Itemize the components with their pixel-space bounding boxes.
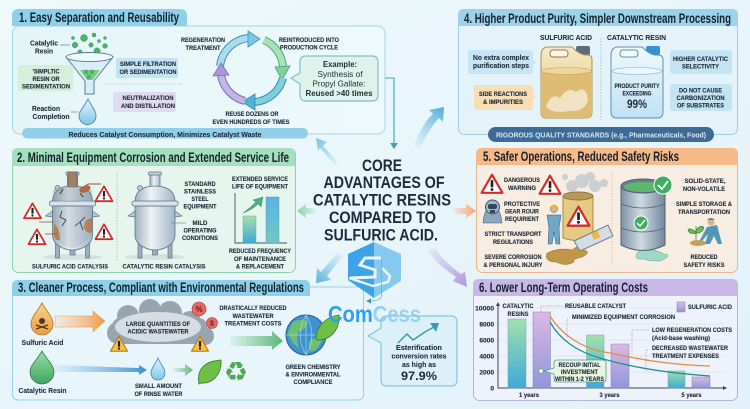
chart: service life: [229, 176, 291, 270]
arrow: to panel 3: [316, 252, 343, 283]
tag: no carbonization: CARBONIZATION: [676, 95, 725, 102]
tag: simple filtration: SIMPLE FILTRATION: [120, 61, 176, 68]
tag: no carbonization: OF SUBSTRATES: [677, 102, 725, 110]
icon: warning triangle: [95, 186, 113, 201]
quality pill: [488, 127, 714, 142]
label: protective gear: [504, 201, 541, 223]
title: CORE: [362, 157, 402, 175]
chart: operating costs: REUSABLE CATALYST: [565, 303, 626, 310]
icon: cost badge: $: [210, 320, 214, 328]
label: mild conditions: [171, 220, 219, 242]
icon: warning: [482, 175, 502, 193]
tag: neutralization: AND DISTILLATION: [121, 103, 175, 110]
tag: selectivity: SELECTIVITY: [682, 64, 720, 70]
label: catalytic resin: Catalytic: [30, 38, 58, 48]
arrow: rinse to leaf: [173, 364, 193, 376]
tag: resin or sedimentation: 'SIMPLTIC: [32, 68, 60, 76]
arrow: to panel 6: [428, 248, 467, 287]
heading 6: 6. Lower Long-Term Operating Costs: [479, 280, 648, 295]
heading 1: 1. Easy Separation and Reusability: [19, 10, 179, 25]
label: reuse: REUSE DOZENS OR: [226, 111, 279, 118]
label: solid state: SOLID-STATE,: [684, 178, 726, 185]
chart: service life: & REPLACEMENT: [236, 264, 284, 270]
label: reduced costs: TREATMENT COSTS: [224, 320, 282, 328]
callout: propyl gallate example: [291, 56, 378, 101]
label: reduced costs: [220, 305, 287, 328]
chart: operating costs: LOW REGENERATION COSTS: [652, 327, 733, 334]
label: severe corrosion: & PERSONAL INJURY: [484, 262, 543, 269]
icon: warning: [191, 336, 209, 351]
icon: leaf: [198, 360, 221, 384]
label: protective gear: GEAR ROUIR: [505, 208, 539, 216]
panel: 6 lower long-term costs: [473, 279, 738, 400]
icon: respirator suit: [483, 200, 502, 223]
panel: 3 cleaner process: [12, 280, 364, 400]
quality pill: RIGOROUS QUALITY STANDARDS (e.g., Pharmaceuticals, Food): [496, 130, 706, 140]
panel: 1 easy separation and reusability: [12, 9, 385, 139]
label: catalytic resin: [30, 38, 70, 56]
label: rate text: Esterification: [396, 343, 442, 352]
icon: corroded reactor: [39, 172, 102, 260]
heading 5: 5. Safer Operations, Reduced Safety Risks: [483, 149, 679, 164]
chart: operating costs: [475, 302, 733, 399]
title: SULFURIC ACID.: [324, 226, 438, 244]
chart: service life: EXTENDED SERVICE: [232, 176, 288, 183]
arrow: to panel 5: [453, 204, 476, 218]
label: green chemistry: COMPLIANCE: [294, 379, 333, 386]
watermark logo: [328, 242, 421, 327]
label: rate text: as high as: [402, 360, 436, 369]
chart: operating costs: 2000: [479, 370, 494, 376]
panel: 2 minimal equipment corrosion: [12, 148, 296, 272]
label: simple storage: SIMPLE STORAGE &: [676, 201, 732, 208]
tag: no extra purification: No extra complex: [473, 53, 530, 62]
label: rinse water: OF RINSE WATER: [134, 391, 183, 398]
connector arrow from example callout to centre: [378, 78, 398, 149]
label: sulfuric acid: Sulfuric Acid: [22, 338, 64, 347]
title: COMPARED TO: [329, 209, 436, 227]
chart: operating costs: 0: [490, 386, 494, 392]
label: simple storage: TRANSPORTATION: [678, 209, 730, 216]
label: rinse water: SMALL AMOUNT: [135, 383, 182, 390]
label: sulfuric acid: SULFURIC ACID: [540, 33, 593, 42]
chart: operating costs: CATALYTIC: [502, 303, 534, 310]
tag: selectivity: [670, 50, 732, 74]
label: strict transport: STRICT TRANSPORT: [484, 231, 542, 238]
icon: funnel with resin beads: [66, 33, 113, 94]
icon: safe resin drum: [621, 176, 672, 261]
callout: propyl gallate example: Synthesis of: [318, 70, 363, 79]
label: green chemistry: GREEN CHEMISTRY: [286, 364, 341, 371]
label: sulfuric acid catalysis: SULFURIC ACID CATALYSIS: [32, 264, 109, 270]
label: reuse: [212, 111, 290, 126]
label: dangerous warning: DANGEROUS: [504, 177, 540, 184]
label: stainless steel: STANDARD: [184, 181, 216, 188]
label: rate text: [392, 343, 446, 383]
icon: droplet: [79, 99, 96, 124]
tag: resin or sedimentation: [18, 65, 73, 91]
title: ADVANTAGES OF: [324, 174, 444, 192]
label: severe corrosion: SEVERE CORROSION: [484, 254, 542, 261]
chart: operating costs: DECREASED WASTEWATER: [652, 345, 728, 352]
heading 2: 2. Minimal Equipment Corrosion and Extended Service Life: [17, 150, 289, 165]
chart: operating costs: 5 years: [682, 392, 702, 399]
chart: service life: LIFE OF EQUIPMENT: [232, 184, 288, 190]
chart: operating costs: 1 years: [519, 392, 539, 399]
label: reintroduced: PRODUCTION CYCLE: [280, 44, 338, 52]
label: mild conditions: MILD: [192, 220, 208, 227]
heading 3: 3. Cleaner Process, Compliant with Environmental Regulations: [18, 280, 304, 295]
tag: neutralization: NEUTRALIZATION: [122, 95, 174, 102]
chart: operating costs: 4000: [479, 354, 494, 360]
icon: globe with leaf: [286, 315, 339, 355]
tag: no carbonization: [670, 84, 732, 111]
summary pill: [22, 128, 308, 139]
chart: operating costs: 6000: [479, 338, 494, 344]
label: strict transport: [484, 231, 542, 246]
label: dangerous warning: WARNING: [508, 185, 536, 192]
icon: wastewater cloud: [107, 299, 214, 345]
label: protective gear: PROTECTIVE: [504, 201, 541, 208]
label: regeneration treatment: REGENERATION: [181, 37, 225, 44]
arrow: to panel 4: [414, 107, 444, 148]
icon: warning: [540, 176, 560, 194]
label: stainless steel: EQUIPMENT: [184, 204, 216, 210]
chart: operating costs: RESINS: [508, 311, 529, 318]
label: simple storage: [676, 201, 732, 216]
icon: upward trend: [398, 323, 439, 343]
label: reaction completion: [32, 104, 78, 121]
watermark logo: ComCess: [328, 301, 421, 327]
callout: propyl gallate example: Reused >40 times: [306, 89, 373, 98]
chart: operating costs: (Acid-base washing): [652, 335, 710, 342]
tag: selectivity: HIGHER CATALYTIC: [673, 56, 728, 63]
label: reintroduced: REINTRODUCED INTO: [279, 37, 339, 44]
callout: recoup investment: RECOUP INITIAL: [558, 362, 600, 369]
tag: no carbonization: DO NOT CAUSE: [679, 88, 723, 94]
icon: percent badge: [192, 302, 206, 316]
icon: warning: [110, 336, 128, 351]
label: regeneration treatment: [181, 37, 225, 52]
callout: recoup investment: [538, 360, 606, 383]
label: rate text: conversion rates: [392, 352, 446, 360]
label: reduced costs: WASTEWATER: [232, 313, 274, 320]
chart: operating costs: 3 years: [600, 392, 620, 399]
icon: rinse water drop: [151, 358, 165, 380]
callout: recoup investment: WITHIN 1-2 YEARS: [555, 376, 604, 383]
tag: resin or sedimentation: RESIN OR: [32, 76, 60, 83]
tag: side reactions: SIDE REACTIONS: [479, 91, 528, 98]
icon: wastewater cloud: LARGE QUANTITIES OF: [126, 321, 190, 328]
chart: operating costs: MINIMIZED EQUIPMENT CORROSION: [572, 314, 675, 321]
icon: sulfuric acid jug: [541, 46, 592, 118]
tag: no extra purification: [468, 50, 537, 74]
chart: operating costs: 10000: [475, 306, 494, 312]
label: catalytic resin: Catalytic Resin: [18, 386, 67, 395]
label: strict transport: REGULATIONS: [493, 239, 534, 246]
callout: propyl gallate example: Propyl Gallate:: [312, 80, 366, 88]
icon: cost badge: [206, 318, 218, 328]
label: rate text: 97.9%: [401, 369, 437, 383]
panel: 5 safer operations: [476, 148, 738, 272]
callout: propyl gallate example: Example:: [323, 60, 357, 69]
label: green chemistry: & ENVIRONMENTAL: [286, 372, 340, 378]
label: reaction completion: Completion: [32, 112, 70, 121]
icon: catalytic resin jug: [611, 46, 663, 118]
label: reintroduced: [279, 37, 339, 52]
label: catalytic resin: CATALYTIC RESIN: [607, 33, 666, 42]
arrow: to green chemistry: [230, 331, 283, 350]
icon: warning triangle: [24, 203, 41, 218]
label: solid state: [683, 178, 726, 193]
arrow: to panel 1: [316, 138, 338, 165]
label: reduced safety risks: [684, 254, 725, 269]
label: stainless steel: STEEL: [192, 196, 208, 203]
icon: leaking acid drum: [546, 172, 613, 264]
tag: side reactions: [474, 85, 537, 110]
label: reduced safety risks: SAFETY RISKS: [684, 262, 725, 269]
tag: side reactions: & IMPURITIES: [483, 99, 524, 106]
title: [313, 157, 451, 244]
cycle diagram: [213, 31, 290, 110]
label: mild conditions: CONDITIONS: [182, 235, 219, 242]
label: green chemistry: [286, 364, 341, 386]
icon: catalytic resin jug: EXCEEDING: [622, 90, 652, 98]
chart: service life: OF MAINTENANCE: [234, 256, 287, 263]
label: catalytic resin: Resin: [35, 46, 53, 56]
label: severe corrosion: [484, 254, 543, 269]
icon: wastewater cloud: ACIDIC WASTEWATER: [128, 328, 189, 336]
icon: catalytic resin drop: [30, 351, 54, 384]
icon: percent badge: %: [195, 305, 203, 314]
chart: operating costs: 8000: [479, 322, 494, 328]
label: reduced costs: DRASTICALLY REDUCED: [220, 305, 287, 312]
label: solid state: NON-VOLATILE: [683, 186, 726, 193]
arrow: to panel 2: [297, 204, 316, 218]
summary pill: Reduces Catalyst Consumption, Minimizes Catalyst Waste: [68, 130, 262, 139]
chart: operating costs: TREATMENT EXPENSES: [652, 353, 720, 360]
icon: gardener: [688, 218, 722, 246]
icon: catalytic resin jug: PRODUCT PURITY: [614, 83, 660, 90]
icon: sulfuric acid drop: [31, 303, 53, 335]
chart: service life: REDUCED FREQUENCY: [229, 248, 291, 255]
tag: simple filtration: OR SEDIMENTATION: [120, 69, 177, 76]
tag: resin or sedimentation: SEDIMENTATION: [22, 84, 70, 90]
label: mild conditions: OPERATING: [184, 228, 216, 234]
callout: esterification rate: [368, 316, 457, 386]
tag: no extra purification: purification steps: [473, 61, 529, 70]
label: stainless steel: [184, 181, 217, 210]
callout: recoup investment: INVESTMENT: [561, 369, 598, 376]
chart: operating costs: SULFURIC ACID: [688, 304, 732, 311]
tag: simple filtration: [116, 58, 178, 78]
label: regeneration treatment: TREATMENT: [186, 45, 220, 52]
label: reaction completion: Reaction: [32, 104, 60, 113]
label: protective gear: REQUIRIENT: [505, 216, 539, 223]
icon: clean reactor: [125, 172, 185, 260]
icon: catalytic resin jug: 99%: [627, 97, 647, 111]
heading 2: [12, 148, 295, 166]
title: CATALYTIC RESINS: [313, 192, 451, 210]
icon: warning triangle: [95, 224, 113, 239]
label: reduced safety risks: REDUCED: [690, 254, 718, 261]
panel: 4 higher product purity: [458, 9, 738, 142]
label: rinse water: [134, 383, 183, 398]
label: stainless steel: STAINLESS: [184, 188, 217, 196]
label: catalytic resin catalysis: CATALYTIC RESIN CATALYSIS: [122, 264, 206, 270]
heading 1: [12, 9, 187, 26]
heading 3: [12, 280, 310, 296]
tag: neutralization: [113, 92, 176, 112]
arrow: acid to wastewater: [55, 311, 105, 332]
icon: recycle: ♻: [224, 357, 248, 388]
label: dangerous warning: [504, 177, 540, 192]
arrow: resin to rinse water: [55, 365, 147, 375]
icon: warning triangle: [28, 229, 46, 244]
label: reuse: EVEN HUNDREDS OF TIMES: [212, 119, 290, 126]
